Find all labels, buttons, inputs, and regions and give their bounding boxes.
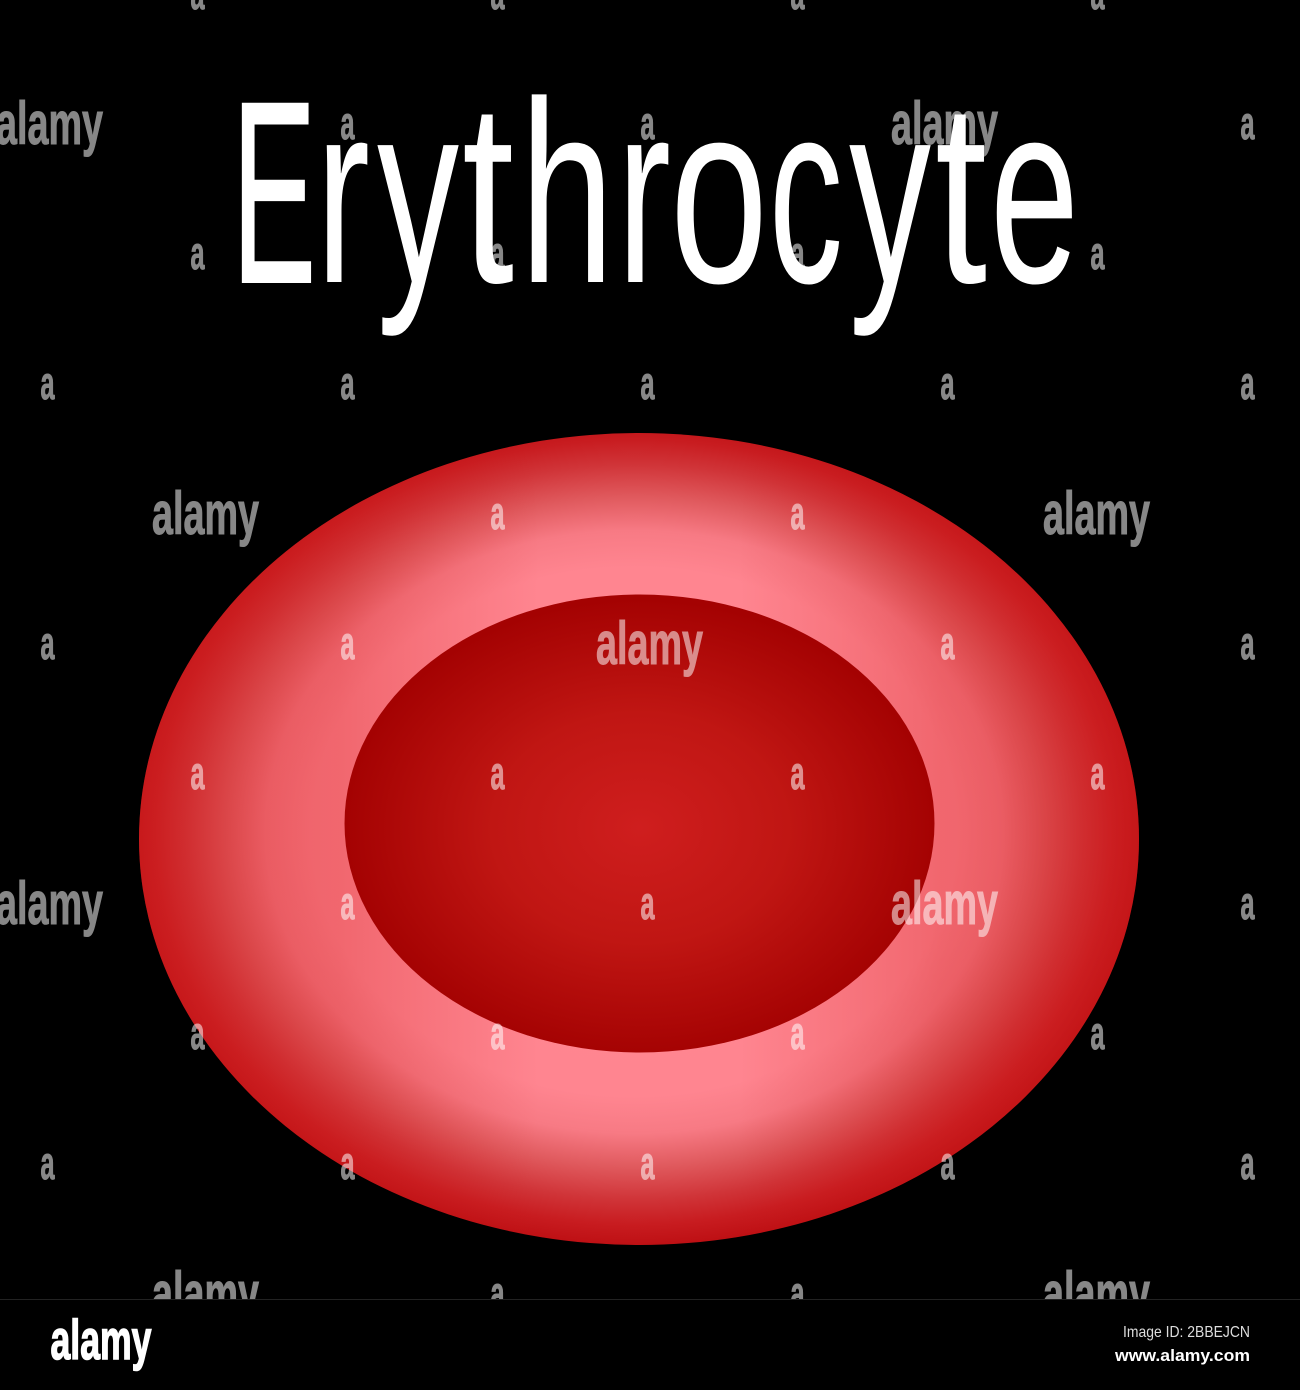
watermark pattern: a [790, 227, 805, 279]
watermark pattern: a [640, 877, 655, 929]
website: www.alamy.com [1114, 1346, 1250, 1365]
title: t [462, 48, 515, 337]
watermark pattern: a [190, 1007, 205, 1059]
cell side shading [139, 433, 1139, 1245]
watermark pattern: alamy [596, 610, 703, 677]
title: y [849, 48, 931, 339]
watermark pattern: a [640, 1137, 655, 1189]
watermark pattern: alamy [1043, 1260, 1150, 1327]
title: c [769, 48, 843, 337]
title: o [670, 48, 768, 337]
watermark pattern: a [40, 1137, 55, 1189]
watermark pattern: a [490, 487, 505, 539]
watermark pattern: a [340, 97, 355, 149]
title: y [377, 48, 459, 339]
watermark pattern: a [940, 1137, 955, 1189]
footer logo: alamy [50, 1308, 152, 1371]
watermark pattern: a [340, 357, 355, 409]
title: r [617, 48, 671, 337]
watermark pattern: a [190, 747, 205, 799]
title: r [316, 48, 370, 337]
title: t [935, 48, 988, 337]
watermark pattern: a [40, 357, 55, 409]
watermark pattern: a [490, 747, 505, 799]
watermark pattern: a [790, 747, 805, 799]
watermark pattern: a [490, 1007, 505, 1059]
cell central depression [344, 594, 934, 1052]
watermark pattern: alamy [152, 1260, 259, 1327]
image id: Image ID: 2BBEJCN [1123, 1324, 1250, 1341]
watermark pattern: a [640, 357, 655, 409]
watermark pattern: a [940, 617, 955, 669]
watermark pattern: a [1090, 747, 1105, 799]
watermark pattern: a [340, 617, 355, 669]
watermark pattern: a [640, 97, 655, 149]
watermark pattern: a [490, 227, 505, 279]
watermark pattern: a [1240, 357, 1255, 409]
title: h [520, 48, 614, 337]
watermark pattern: a [490, 1267, 505, 1319]
watermark pattern: a [790, 487, 805, 539]
title: E [232, 48, 316, 337]
watermark pattern: a [1090, 1007, 1105, 1059]
watermark pattern: a [340, 1137, 355, 1189]
watermark pattern: a [1240, 617, 1255, 669]
watermark pattern: alamy [0, 90, 103, 157]
footer bar [0, 1299, 1300, 1390]
watermark pattern: a [1240, 97, 1255, 149]
watermark pattern: a [1090, 227, 1105, 279]
watermark pattern: alamy [891, 90, 998, 157]
watermark pattern: a [1240, 877, 1255, 929]
title: e [990, 48, 1079, 337]
watermark pattern: a [790, 1267, 805, 1319]
watermark pattern: a [340, 877, 355, 929]
cell outer body [139, 433, 1139, 1245]
watermark pattern: alamy [891, 870, 998, 937]
watermark pattern: a [40, 617, 55, 669]
watermark pattern: alamy [1043, 480, 1150, 547]
watermark pattern: a [790, 1007, 805, 1059]
watermark pattern: a [1240, 1137, 1255, 1189]
watermark pattern: alamy [152, 480, 259, 547]
watermark pattern: alamy [0, 870, 103, 937]
watermark pattern: a [940, 357, 955, 409]
watermark pattern: a [190, 227, 205, 279]
red blood cell illustration [139, 433, 1139, 1245]
